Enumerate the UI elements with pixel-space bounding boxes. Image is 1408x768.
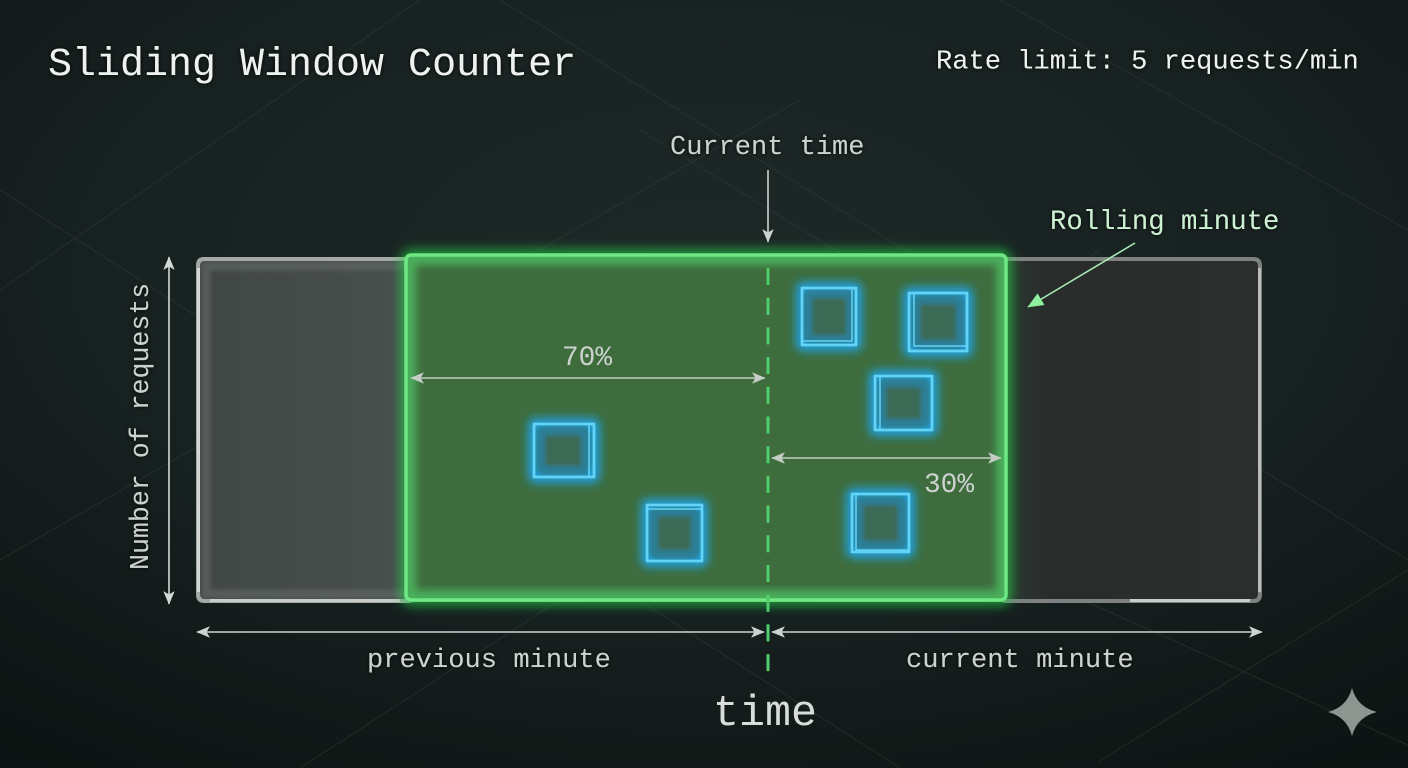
title: Sliding Window Counter (48, 43, 576, 88)
icon: sparkle (1328, 688, 1377, 736)
panel: current minute band (1000, 257, 1262, 603)
panel: rolling minute window (406, 255, 1006, 600)
previous minute axis: previous minute (367, 645, 611, 676)
time axis label: time (713, 690, 817, 739)
request 3 (875, 376, 932, 430)
request 4 (852, 494, 909, 552)
y axis: Number of requests (126, 283, 156, 570)
rolling minute label: Rolling minute (1050, 207, 1279, 238)
request squares (534, 288, 967, 561)
request 1 (802, 288, 856, 345)
70% measure: 70% (562, 343, 612, 374)
request 2 (909, 293, 967, 351)
request 6 (647, 505, 702, 561)
current time divider (766, 268, 770, 672)
rolling minute label (1028, 207, 1279, 307)
30% measure: 30% (924, 470, 974, 501)
rate limit label: Rate limit: 5 requests/min (936, 46, 1359, 78)
arrow: current time (767, 170, 769, 242)
current time label: Current time (670, 133, 864, 163)
arrow: y axis (168, 257, 170, 604)
panel: previous minute band (196, 257, 426, 603)
arrow: rolling minute (1028, 243, 1135, 307)
current minute axis: current minute (906, 645, 1134, 676)
request 5 (534, 424, 594, 477)
